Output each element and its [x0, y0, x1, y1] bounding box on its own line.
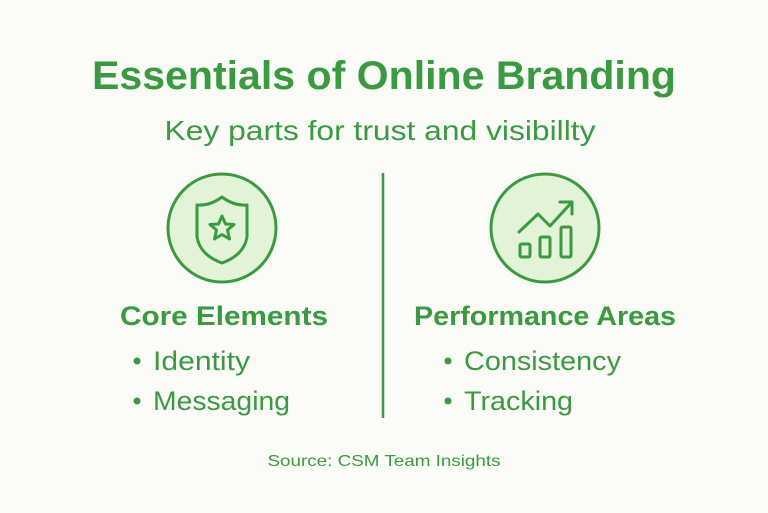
bullet list: core	[134, 346, 290, 416]
subtitle: Key parts for trust and visibillty	[164, 115, 596, 146]
bullet list: core: Identity	[153, 346, 251, 376]
bullet list: core: Messaging	[153, 386, 290, 416]
source: Source: CSM Team Insights	[268, 453, 500, 470]
icon: shield with star	[168, 174, 276, 282]
title: Essentials of Online Branding	[92, 54, 676, 98]
heading: core elements: Core Elements	[120, 301, 328, 331]
bullet list: performance: Tracking	[464, 386, 573, 416]
panel: core elements	[120, 174, 328, 416]
icon: growth chart	[491, 174, 599, 282]
heading: performance areas: Performance Areas	[414, 301, 676, 331]
divider	[382, 173, 384, 418]
bullet list: performance: Consistency	[464, 346, 622, 376]
panel: performance areas	[414, 174, 676, 416]
bullet list: performance	[444, 346, 622, 416]
